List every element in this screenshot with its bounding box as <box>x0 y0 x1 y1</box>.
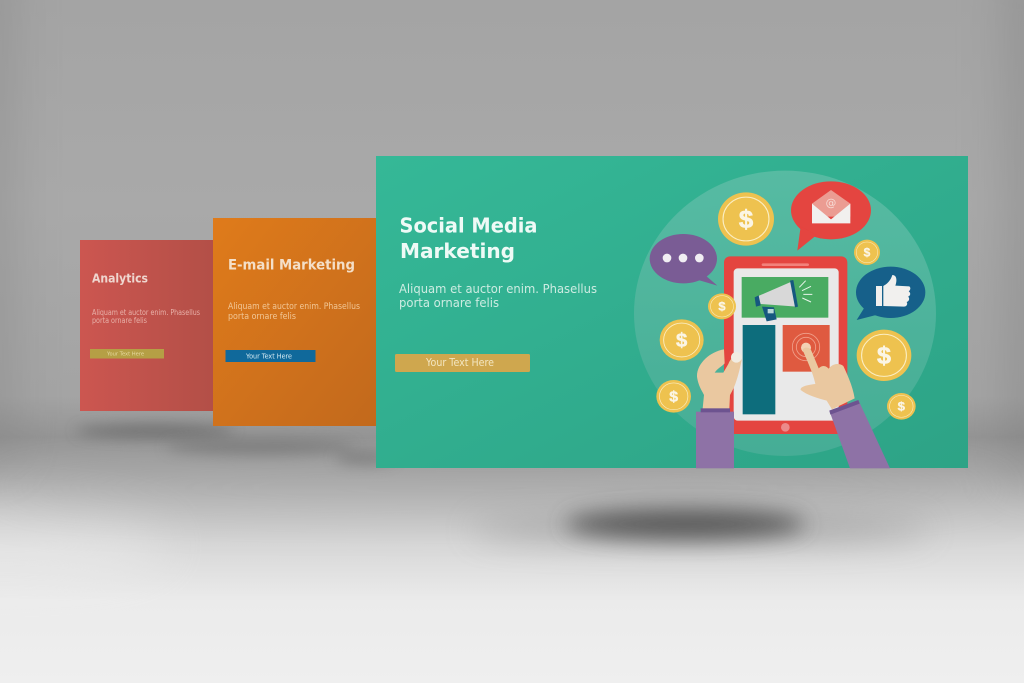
tile: touch target <box>783 325 830 372</box>
text block: analytics body <box>92 308 200 325</box>
illustration: tablet, hands, coins and speech bubbles <box>634 171 936 468</box>
button: e-mail: Your Text Here <box>245 352 292 360</box>
text block: e-mail body <box>228 302 360 322</box>
heading: e-mail marketing: E-mail Marketing <box>228 258 355 274</box>
bubble: email <box>791 181 871 251</box>
text block: e-mail body: Aliquam et auctor enim. Phasellus <box>228 302 360 312</box>
tile: teal column <box>743 325 775 414</box>
panel: social media marketing <box>376 156 968 468</box>
coin: bottom left <box>656 380 691 413</box>
heading: social media marketing <box>400 214 538 263</box>
button: analytics <box>90 349 164 358</box>
heading: social media marketing: Social Media <box>400 214 538 238</box>
button: social: Your Text Here <box>425 357 494 369</box>
text block: social body <box>399 281 597 310</box>
coin: near tablet <box>708 293 736 319</box>
circle backdrop <box>634 171 936 456</box>
text block: analytics body: porta ornare felis <box>92 316 147 325</box>
coin: bottom right <box>887 393 916 420</box>
bubble: chat dots <box>650 234 717 286</box>
button: social <box>395 354 530 372</box>
heading: social media marketing: Marketing <box>400 239 515 263</box>
coin: right large <box>857 330 911 381</box>
tile: megaphone <box>742 277 828 321</box>
panel: analytics <box>80 240 213 411</box>
text block: social body: Aliquam et auctor enim. Phasellus <box>399 281 597 296</box>
text block: analytics body: Aliquam et auctor enim. Phasellus <box>92 308 200 317</box>
coin: top right small <box>854 240 880 265</box>
hand: left, holding with sleeve <box>696 349 742 468</box>
coin: top large <box>718 192 774 246</box>
hand: right, pointing with sleeve <box>801 348 890 468</box>
button: analytics: Your Text Here <box>106 352 145 358</box>
panel: e-mail marketing <box>213 218 376 426</box>
text block: social body: porta ornare felis <box>399 295 499 310</box>
text block: e-mail body: porta ornare felis <box>228 312 296 322</box>
coin: left medium <box>660 319 704 361</box>
tablet <box>724 256 847 434</box>
button: e-mail <box>226 350 316 362</box>
heading: analytics: Analytics <box>92 272 148 286</box>
bubble: thumbs up <box>856 267 925 320</box>
bubble: email: @ <box>826 197 836 210</box>
